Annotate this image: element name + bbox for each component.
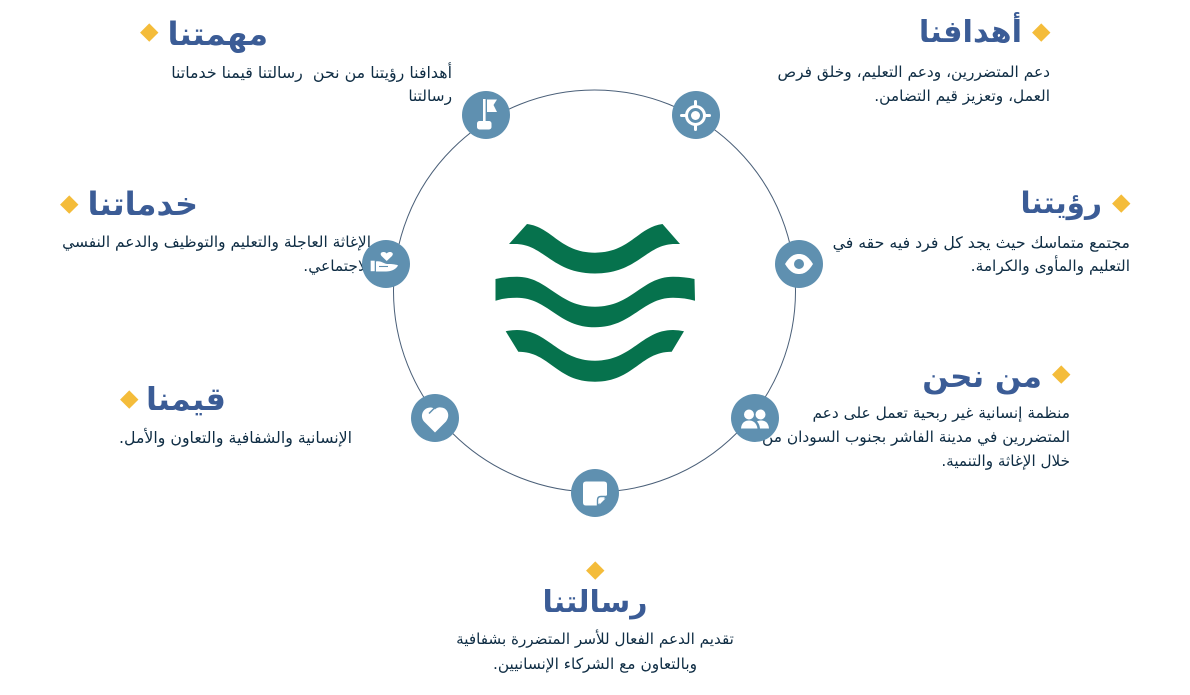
icon: hand with heart xyxy=(362,240,410,288)
heading: message: رسالتنا xyxy=(542,585,648,620)
text: services line 2: الاجتماعي. xyxy=(303,257,371,275)
panel: our message xyxy=(456,561,734,673)
diamond bullet: goals xyxy=(1032,23,1050,41)
icon: target xyxy=(672,91,720,139)
icon: people xyxy=(731,394,779,442)
icon: flag xyxy=(462,91,510,139)
diamond bullet: mission xyxy=(140,23,158,41)
icon: eye xyxy=(775,240,823,288)
text: message line 2: وبالتعاون مع الشركاء الإنسانيين. xyxy=(493,655,697,673)
heading: who we are: من نحن xyxy=(922,359,1042,395)
icon: sticky note xyxy=(571,469,619,517)
panel: values xyxy=(119,381,352,447)
diamond bullet: vision xyxy=(1112,194,1130,212)
text: values: الإنسانية والشفافية والتعاون والأمل. xyxy=(119,428,352,447)
icon: heart xyxy=(411,394,459,442)
panel: goals xyxy=(777,12,1050,105)
logo: three green waves xyxy=(496,224,695,382)
diamond bullet: services xyxy=(60,195,78,213)
panel: mission xyxy=(140,15,452,105)
text: vision: مجتمع متماسك حيث يجد كل فرد فيه حقه في xyxy=(833,233,1130,252)
panel: vision xyxy=(833,186,1130,275)
panel: who we are xyxy=(762,359,1070,470)
text: mission: أهدافنا رؤيتنا من نحن رسالتنا قيمنا خدماتنا xyxy=(171,63,452,82)
diamond bullet: values xyxy=(120,390,138,408)
text: mission line 2: رسالتنا xyxy=(408,87,452,105)
text: who we are line 2: المتضررين في مدينة الفاشر بجنوب السودان من xyxy=(762,428,1070,446)
text: who we are: منظمة إنسانية غير ربحية تعمل على دعم xyxy=(812,404,1070,422)
text: goals: دعم المتضررين، ودعم التعليم، وخلق فرص xyxy=(777,63,1050,81)
heading: vision: رؤيتنا xyxy=(1020,186,1102,220)
heading: mission: مهمتنا xyxy=(167,15,268,53)
text: services: الإغاثة العاجلة والتعليم والتوظيف والدعم النفسي xyxy=(62,233,371,251)
text: message: تقديم الدعم الفعال للأسر المتضررة بشفافية xyxy=(456,630,734,648)
diamond bullet: who we are xyxy=(1052,365,1070,383)
text: who we are line 3: خلال الإغاثة والتنمية. xyxy=(941,452,1070,470)
text: vision line 2: التعليم والمأوى والكرامة. xyxy=(971,257,1130,275)
heading: values: قيمنا xyxy=(146,381,226,418)
heading: goals: أهدافنا xyxy=(919,15,1022,50)
panel: services xyxy=(60,185,371,275)
heading: services: خدماتنا xyxy=(88,185,198,223)
text: goals line 2: العمل، وتعزيز قيم التضامن. xyxy=(874,87,1050,105)
diamond bullet: message xyxy=(586,561,604,579)
